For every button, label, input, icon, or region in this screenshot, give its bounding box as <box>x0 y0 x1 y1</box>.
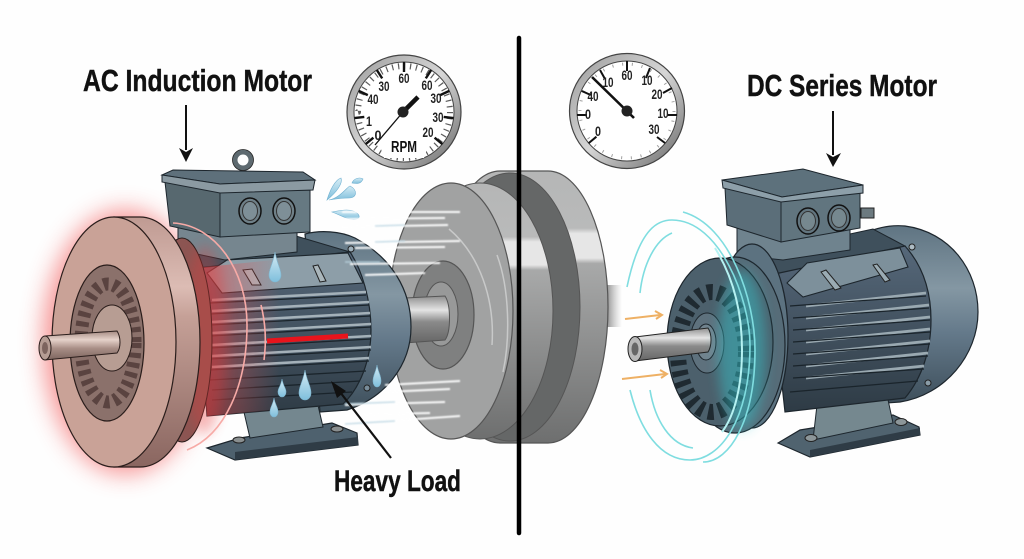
gauge: left RPM dial: 20 <box>422 124 434 140</box>
shaft <box>635 328 711 361</box>
gauge: right dial: 10 <box>642 72 653 88</box>
vent slats <box>678 292 746 412</box>
gauge: right dial: 0 <box>585 106 591 122</box>
orange arrows <box>622 311 667 379</box>
end cap <box>305 232 411 412</box>
neck <box>178 222 297 260</box>
eye bolt <box>232 150 254 170</box>
foot <box>207 401 358 460</box>
top plateau <box>787 248 908 297</box>
vent slats <box>81 284 135 402</box>
arrow: AC label to motor <box>179 105 193 162</box>
right motor: DC series <box>622 169 978 462</box>
pulley hub <box>412 261 474 369</box>
gauge: right dial: 10 <box>602 74 614 90</box>
pulley front rim <box>407 183 553 439</box>
top plateau <box>207 253 363 293</box>
gauge: left RPM dial: RPM <box>391 139 417 156</box>
gauge: right dial: 60 <box>622 67 633 83</box>
speed lines <box>342 212 460 424</box>
front disc <box>39 217 200 467</box>
heat glow <box>43 210 207 474</box>
gauge: left RPM dial: 1 <box>366 113 372 129</box>
title: DC Series Motor: DC Series Motor <box>747 68 937 103</box>
gauge: right dial <box>570 54 684 168</box>
gauge: left RPM dial: 30 <box>430 90 442 106</box>
terminal box <box>722 169 874 242</box>
title: AC Induction Motor: AC Induction Motor <box>83 63 312 98</box>
heat arc <box>173 223 265 450</box>
upper cooling fins <box>770 229 905 285</box>
gauge: right dial: 40 <box>588 88 599 104</box>
front housing <box>628 244 788 433</box>
flange <box>152 238 212 442</box>
neck <box>737 222 850 260</box>
gauge: left RPM dial: 30 <box>432 109 444 125</box>
gauge: right dial: 10 <box>658 105 669 121</box>
motor body with fins <box>197 252 371 416</box>
upper cooling fins <box>175 236 350 268</box>
end cap <box>860 226 978 405</box>
left motor: AC induction <box>39 150 411 474</box>
gauge: right dial: 30 <box>648 121 660 137</box>
gauge: right dial: 0 <box>595 123 601 139</box>
gauge: right dial: 20 <box>652 86 663 102</box>
red indicator bar <box>267 336 348 341</box>
arrow: DC label to motor <box>826 111 841 167</box>
cyan overlay <box>718 270 766 430</box>
foot <box>778 395 920 457</box>
gauge: left RPM dial: 60 <box>398 70 410 86</box>
pulley back rim <box>440 171 608 443</box>
gauge: left RPM dial: 0 <box>374 127 382 143</box>
sweat splash <box>327 178 363 219</box>
pulley groove <box>440 173 580 441</box>
cyan motion arcs <box>627 212 755 462</box>
shaft <box>45 331 120 360</box>
gauge: left RPM dial <box>347 55 461 169</box>
pulley shaft stub <box>606 285 622 327</box>
drive shaft <box>405 296 450 343</box>
gauge: left RPM dial: 60 <box>422 77 433 93</box>
flywheel pulley <box>389 171 622 443</box>
gauge: left RPM dial: 40 <box>368 91 379 107</box>
heat overlay <box>204 261 274 416</box>
divider line <box>517 38 521 533</box>
terminal box <box>162 170 315 237</box>
motor body with fins <box>770 246 931 412</box>
water drops <box>269 252 381 417</box>
arrow: heavy load pointer <box>331 381 391 458</box>
pulley face <box>389 183 513 439</box>
label: Heavy Load: Heavy Load <box>334 465 461 498</box>
gauge: left RPM dial: 30 <box>378 78 390 94</box>
